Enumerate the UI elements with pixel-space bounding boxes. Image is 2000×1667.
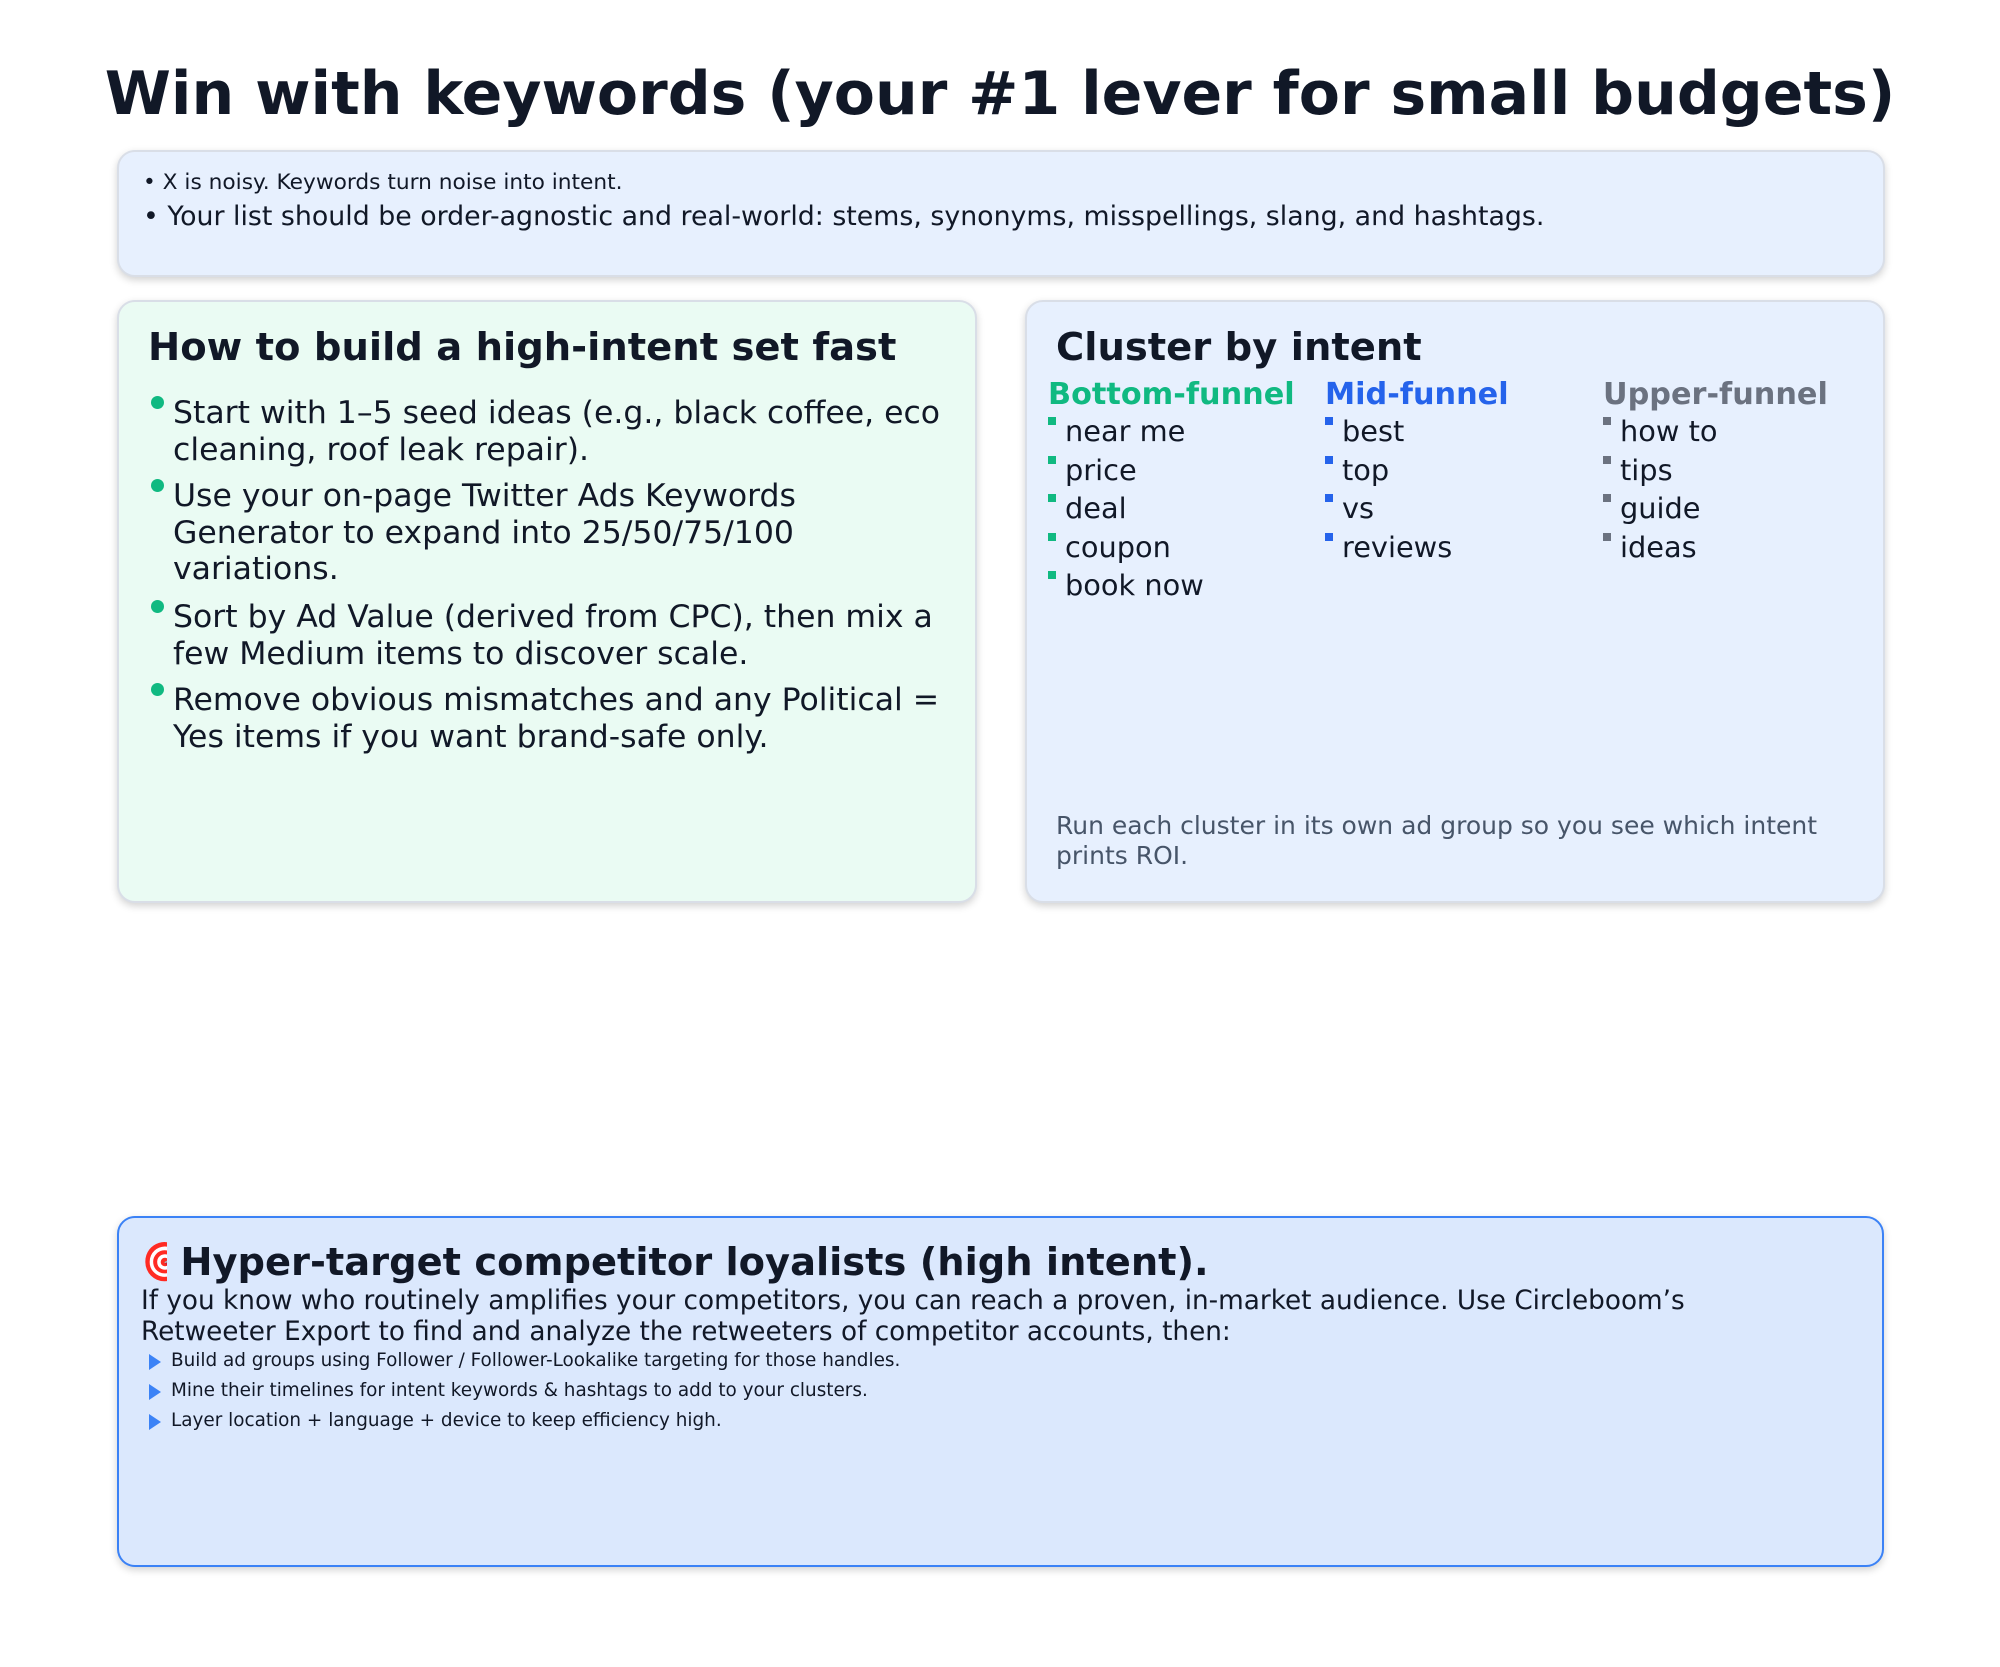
column: upper-funnel: guide [1620, 491, 1701, 525]
heading: cluster by intent: Cluster by intent [1056, 325, 1422, 370]
text: description: If you know who routinely amplifies your competitors, you can reach a proven, in-market audience. Use Circleboom’s Retweeter Export to find and analyze the retweeters of competitor accounts, then: [141, 1286, 1685, 1347]
column: bottom-funnel: coupon [1065, 530, 1171, 564]
sub-bullet 2: Mine their timelines for intent keywords & hashtags to add to your clusters. [171, 1380, 868, 1401]
sub-bullet 3: Layer location + language + device to keep efficiency high. [171, 1410, 722, 1431]
bullet 1: Start with 1–5 seed ideas (e.g., black coffee, eco cleaning, roof leak repair). [173, 395, 940, 468]
column: mid-funnel: Mid-funnel [1325, 377, 1509, 412]
column: bottom-funnel: Bottom-funnel [1048, 377, 1295, 412]
column: mid-funnel: reviews [1342, 530, 1452, 564]
column: upper-funnel: tips [1620, 452, 1673, 486]
panel: intro [117, 150, 1885, 277]
column: upper-funnel: how to [1620, 414, 1718, 448]
text: intro line 1: • X is noisy. Keywords turn noise into intent. [143, 170, 623, 195]
panel: how to build [117, 300, 977, 903]
column: upper-funnel: ideas [1620, 530, 1697, 564]
column: bottom-funnel [1048, 377, 1295, 602]
panel: competitor loyalists [117, 1216, 1884, 1567]
bullet 4: Remove obvious mismatches and any Political = Yes items if you want brand-safe only. [173, 682, 939, 754]
column: upper-funnel [1603, 377, 1828, 564]
column: mid-funnel: best [1342, 414, 1404, 448]
heading: how to build: How to build a high-intent set fast [148, 325, 896, 370]
column: upper-funnel: Upper-funnel [1603, 377, 1828, 412]
footnote: cluster tip: Run each cluster in its own ad group so you see which intent prints ROI. [1056, 811, 1817, 870]
bullet 2: Use your on-page Twitter Ads Keywords Generator to expand into 25/50/75/100 variations. [173, 478, 796, 587]
sub-bullet 1: Build ad groups using Follower / Follower-Lookalike targeting for those handles. [171, 1350, 900, 1371]
column: bottom-funnel: near me [1065, 414, 1185, 448]
column: bottom-funnel: price [1065, 452, 1137, 486]
column: mid-funnel: top [1342, 452, 1389, 486]
panel: cluster by intent [1025, 300, 1885, 903]
column: mid-funnel: vs [1342, 491, 1374, 525]
text: intro line 2: • Your list should be order-agnostic and real-world: stems, synonyms, misspellings, slang, and hashtags. [143, 201, 1544, 232]
column: bottom-funnel: deal [1065, 491, 1127, 525]
bullet 3: Sort by Ad Value (derived from CPC), then mix a few Medium items to discover scale. [173, 599, 933, 672]
column: bottom-funnel: book now [1065, 568, 1204, 602]
heading: hyper-target: Hyper-target competitor loyalists (high intent). [180, 1240, 1209, 1285]
column: mid-funnel [1325, 377, 1509, 564]
title: Win with keywords (your #1 lever for small budgets) [105, 59, 1895, 129]
